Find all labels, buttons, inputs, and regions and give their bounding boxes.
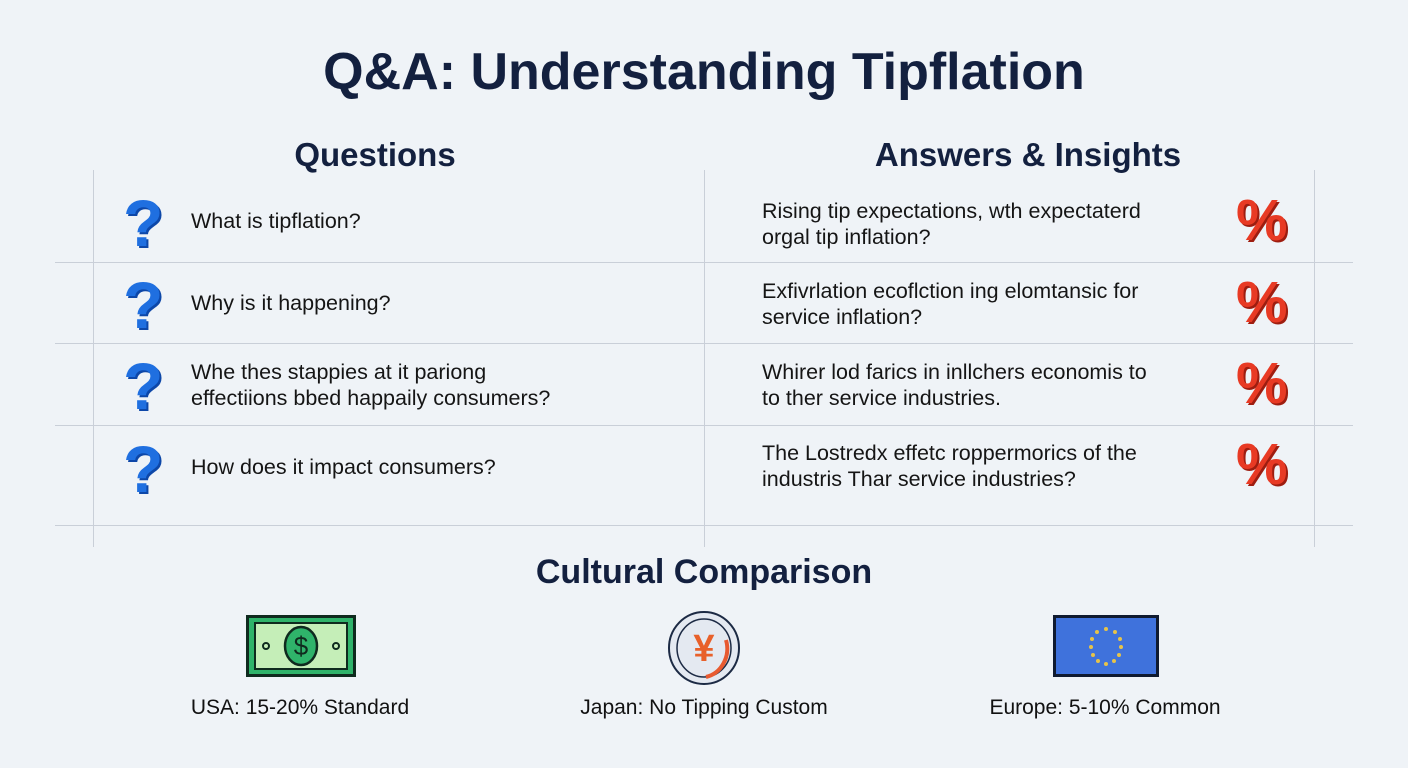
title: Q&A: Understanding Tipflation [323,43,1085,101]
answer 1: Rising tip expectations, wth expectaterd [762,199,1141,223]
answer 3: Whirer lod farics in inllchers economis to [762,360,1147,384]
answer 4: The Lostredx effetc roppermorics of the [762,441,1137,465]
question 2: Why is it happening? [191,291,391,315]
icon: euro note [1053,615,1159,677]
answer 2: service inflation? [762,305,922,329]
answer 4 [762,441,1137,491]
answer 2 [762,279,1138,329]
icon: yen coin [668,611,740,685]
label: Europe: Europe: 5-10% Common [989,696,1221,719]
question 3: Whe thes stappies at it pariong [191,360,486,384]
label: USA: USA: 15-20% Standard [191,696,409,719]
answer 3: to ther service industries. [762,386,1001,410]
panel: QA table [123,186,1288,506]
answer 2: Exfivrlation ecoflction ing elomtansic for [762,279,1138,303]
icon: percent 2: % [1236,270,1288,335]
icon: percent 4: % [1236,432,1288,497]
question 3 [191,360,550,410]
heading: questions: Questions [294,136,456,173]
icon: question 2: ? [123,268,163,342]
icon: yen coin: ¥ [693,628,715,670]
icon: percent 1: % [1236,188,1288,253]
heading: cultural comparison: Cultural Comparison [536,553,872,591]
icon: question 4: ? [123,432,163,506]
icon: question 3: ? [123,349,163,423]
label: Japan: Japan: No Tipping Custom [580,696,828,719]
heading: answers: Answers & Insights [875,136,1181,173]
question 4: How does it impact consumers? [191,455,496,479]
question 1: What is tipflation? [191,209,361,233]
answer 3 [762,360,1147,410]
answer 1 [762,199,1141,249]
icon: question 1: ? [123,186,163,260]
answer 4: industris Thar service industries? [762,467,1076,491]
icon: dollar bill: $ [294,631,309,661]
question 3: effectiions bbed happaily consumers? [191,386,550,410]
icon: dollar bill [246,615,356,677]
icon: percent 3: % [1236,351,1288,416]
answer 1: orgal tip inflation? [762,225,931,249]
